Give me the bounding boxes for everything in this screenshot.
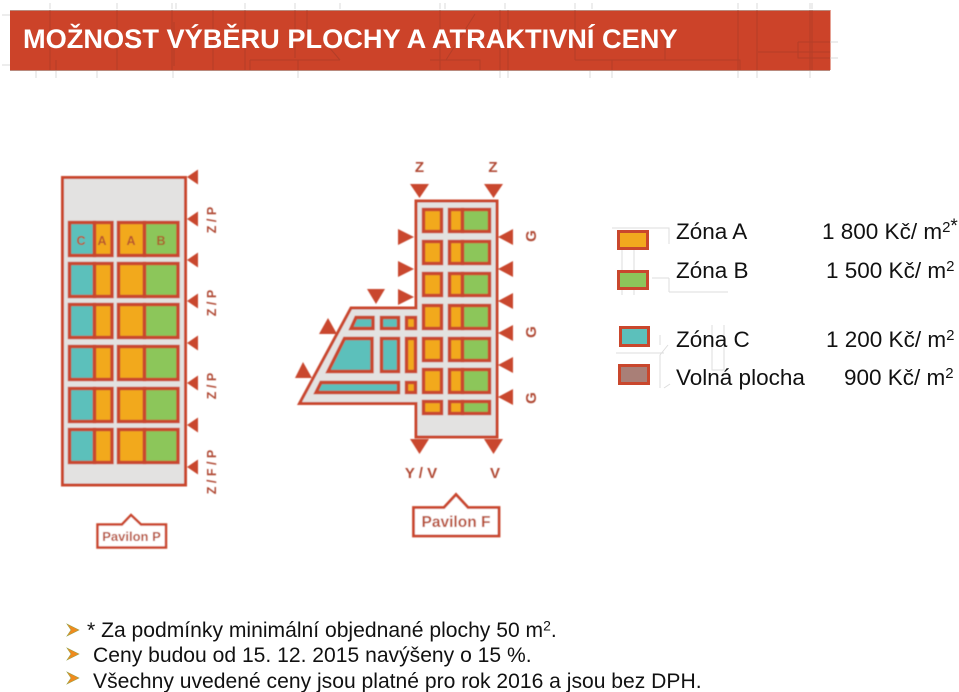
footnote text — [87, 618, 702, 692]
pavilion P tag: Pavilon P — [102, 529, 161, 544]
tower stands — [424, 210, 490, 414]
zone labels: Zóna C — [676, 327, 750, 352]
floor plan: Pavilon P — [62, 170, 219, 548]
hall outline — [300, 201, 497, 437]
pavilion F tag: Pavilon F — [422, 514, 490, 531]
legend — [612, 216, 958, 390]
zone prices: * — [950, 216, 958, 237]
zone prices: 1 800 Kč/ m — [822, 219, 942, 244]
entrance arrows — [187, 170, 198, 474]
entrance labels: G — [523, 326, 540, 338]
stand row 1 with zone letters — [70, 222, 178, 256]
zone prices: 1 200 Kč/ m — [826, 327, 946, 352]
stand row 4 — [70, 346, 178, 380]
zone prices: 2 — [945, 365, 954, 382]
zone labels: Zóna B — [676, 258, 749, 283]
entrance labels: Z / F / P — [205, 450, 219, 494]
stand row 2 — [70, 264, 178, 296]
zone prices: 2 — [946, 258, 954, 275]
floor plan: Pavilon F — [295, 159, 540, 536]
zone labels: Zóna A — [676, 219, 747, 244]
entrance labels: Z — [488, 159, 498, 176]
hall outline — [62, 178, 186, 485]
zone prices: 1 500 Kč/ m — [826, 258, 946, 283]
footnote text: . — [551, 619, 557, 642]
bullet arrows — [67, 624, 79, 684]
entrance labels: Z / P — [205, 207, 219, 233]
stand row 6 — [70, 430, 178, 462]
entrance labels: Z / P — [205, 290, 219, 316]
swatch: zone A — [618, 232, 648, 248]
entrance arrows — [295, 184, 513, 454]
swatch: zone B — [618, 272, 648, 288]
entrance labels: G — [523, 392, 540, 404]
header banner — [2, 3, 838, 78]
entrance labels: Y / V — [405, 465, 437, 482]
entrance labels: G — [523, 230, 540, 242]
entrance labels: Z / P — [205, 373, 219, 399]
stand row 3 — [70, 304, 178, 338]
pavilion F tag — [414, 494, 499, 536]
entrance labels — [405, 159, 540, 482]
wing stands — [316, 318, 416, 392]
zone labels — [676, 219, 805, 390]
stand row 1 with zone letters: A — [126, 234, 136, 248]
swatch: free area — [620, 366, 648, 384]
zone prices — [822, 216, 958, 390]
footnote text: * Za podmínky minimální objednané plochy 50 m — [87, 619, 543, 642]
stand row 5 — [70, 388, 178, 422]
footnote text: Ceny budou od 15. 12. 2015 navýšeny o 15 %. — [93, 644, 532, 667]
stand row 1 with zone letters: B — [156, 234, 166, 248]
pavilion P tag — [98, 515, 166, 548]
zone prices: 2 — [942, 219, 950, 236]
entrance labels: V — [490, 465, 500, 482]
swatch: zone C — [620, 328, 648, 346]
zone labels: Volná plocha — [676, 365, 805, 390]
entrance labels — [205, 207, 219, 494]
zone prices: 900 Kč/ m — [844, 365, 945, 390]
zone prices: 2 — [946, 327, 954, 344]
title: MOŽNOST VÝBĚRU PLOCHY A ATRAKTIVNÍ CENY — [23, 23, 678, 54]
footnote text: 2 — [543, 618, 551, 634]
entrance labels: Z — [415, 159, 424, 176]
stand row 1 with zone letters: A — [97, 234, 107, 248]
footnotes — [67, 618, 702, 692]
stand row 1 with zone letters: C — [76, 234, 86, 248]
